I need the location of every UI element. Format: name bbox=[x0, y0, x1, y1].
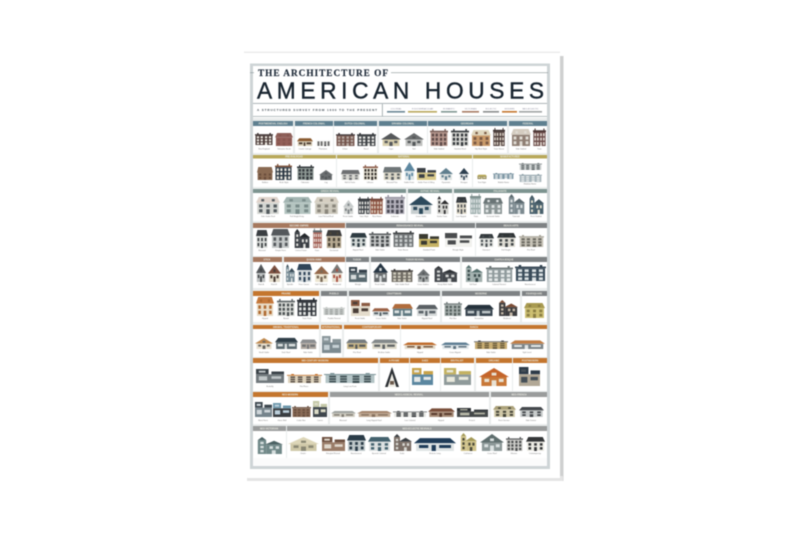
house: ne 5: French bbox=[469, 419, 475, 422]
house: tudor: Shingle bbox=[355, 284, 361, 286]
section: shed: SHED bbox=[422, 360, 429, 362]
house: georgian b: Gambrel Roof bbox=[454, 148, 466, 150]
house: rv 9 bbox=[506, 437, 523, 455]
section: prairie: PRAIRIE bbox=[281, 292, 291, 296]
section: cape cod bbox=[379, 121, 427, 153]
house: urban: Urban bbox=[342, 148, 348, 150]
section: brutalist: BRUTALIST bbox=[451, 360, 464, 362]
house: c 3: Neoclassical bbox=[525, 284, 536, 286]
house: se 1: Mansard bbox=[258, 249, 266, 252]
house: mt 3: Side Gable bbox=[303, 352, 313, 354]
section: craftsman bbox=[349, 291, 440, 322]
section: cape cod: SPANISH COLONIAL bbox=[392, 122, 415, 126]
house: gr 7 bbox=[385, 195, 405, 218]
house: tent: Tent Style bbox=[478, 181, 486, 184]
house: ne 2: Long Hipped Roof bbox=[366, 420, 382, 422]
house: mc 3: Long Low Form bbox=[343, 385, 357, 388]
section: folk colonial: PRE-RAILROAD bbox=[285, 156, 303, 158]
section: ranch bbox=[401, 325, 547, 357]
house: cr 2: Cross Gable bbox=[376, 317, 386, 320]
house: rv 10: Contemporary bbox=[529, 452, 541, 455]
section: gothic revival: GOTHIC REVIVAL bbox=[420, 190, 440, 193]
house: rural: Rural bbox=[364, 148, 369, 150]
house: ital d: Towered bbox=[512, 215, 520, 218]
house: cr 1: Front Gable bbox=[355, 317, 365, 320]
section: neoclassical revival bbox=[330, 392, 489, 424]
section: craftsman: CRAFTSMAN bbox=[387, 292, 402, 296]
house: ba 1: Classical bbox=[482, 250, 490, 252]
house: nf 1: Front Dormer bbox=[498, 419, 510, 422]
legend: VICTORIAN bbox=[465, 107, 477, 110]
house: qa 3: Half Timbered bbox=[315, 283, 327, 286]
house: gr 6: Row Home bbox=[372, 216, 382, 218]
house: i house: Tidewater bbox=[301, 181, 309, 184]
section: georgian bbox=[428, 121, 507, 153]
house: ne 1 bbox=[331, 411, 356, 422]
section: gothic revival bbox=[408, 189, 452, 221]
house: gr 2: Full Height Entry bbox=[290, 215, 304, 218]
house: mo 3: Medieval bbox=[503, 318, 511, 320]
section: federal bbox=[509, 121, 547, 153]
house: gr 2 bbox=[283, 197, 312, 218]
section: minimal traditional: MINIMAL TRADITIONAL bbox=[273, 326, 300, 329]
house: ital e: Front Gabled bbox=[530, 215, 542, 218]
house: mc 2: Flat Plane bbox=[300, 385, 308, 388]
house: rv 2 bbox=[322, 437, 345, 455]
house: nf 2: Side Dormer bbox=[526, 419, 537, 422]
section: moderne bbox=[442, 291, 520, 322]
house: georgian c: Hip Roof Style bbox=[475, 148, 487, 150]
house: federal a: Side Gabled bbox=[516, 148, 526, 150]
section: federal: FEDERAL bbox=[523, 122, 534, 126]
section: neo-eclectic revivals: NEO-ECLECTIC REVIVALS bbox=[402, 428, 432, 430]
house: hall and parlor: Hall & Parlor bbox=[345, 181, 356, 184]
section: ranch: RANCH bbox=[470, 326, 478, 329]
section: postmedieval english: POSTMEDIEVAL ENGLISH bbox=[259, 122, 288, 126]
section: postmedieval english bbox=[253, 121, 293, 153]
section: georgian: GEORGIAN bbox=[461, 122, 474, 126]
section: neo-victorian bbox=[253, 426, 286, 458]
section: brutalist bbox=[441, 358, 474, 391]
house: pueblo: Pueblo Revival bbox=[328, 318, 341, 320]
section: shed bbox=[410, 358, 440, 391]
house: p 1: Hipped bbox=[262, 318, 268, 320]
house: ital c: Centered Gable bbox=[486, 215, 500, 218]
section: a-frame bbox=[380, 358, 409, 391]
house: gr 5: Town Style bbox=[359, 215, 369, 218]
house: ne 5 bbox=[457, 408, 488, 422]
house: rv 1: Chalet bbox=[300, 452, 306, 455]
house: p 3: Town Form bbox=[302, 317, 312, 320]
house: rv 7: Craftsman bbox=[464, 452, 472, 455]
house: c 2: Colonial Revival bbox=[492, 284, 506, 286]
house: neo-victorian bbox=[258, 437, 283, 454]
house: ba 2: Full Height bbox=[501, 248, 511, 252]
house: gr 7: Italianate bbox=[391, 215, 399, 218]
section: dutch colonial: DUTCH COLONIAL bbox=[345, 122, 366, 126]
house: gr 3: Low Pitched Roof bbox=[319, 215, 334, 218]
section: manufactured bbox=[473, 155, 547, 187]
section: beaux arts bbox=[476, 223, 547, 256]
house: rv 10 bbox=[526, 437, 545, 455]
house: foursquare bbox=[524, 303, 545, 318]
house: mo 1: Flat Box bbox=[450, 317, 457, 320]
house: gable front: Gable Front bbox=[404, 181, 414, 184]
house: gr 4 bbox=[343, 200, 354, 218]
house: cr 3: Side Gable bbox=[397, 318, 407, 320]
house: r 2: Cross Hipped bbox=[449, 351, 461, 354]
house: gr 4: Front Gable bbox=[343, 215, 353, 218]
section: italianate: ITALIANATE bbox=[493, 190, 507, 193]
section: neo-eclectic revivals bbox=[287, 426, 547, 458]
section: prairie bbox=[253, 291, 319, 322]
legend: MODERN bbox=[505, 108, 515, 110]
house: rv 4: Spanish Colonial bbox=[372, 453, 387, 455]
house: modular bottom: Modular Home bbox=[524, 182, 536, 186]
house: t 4: Steep Multi Gable bbox=[437, 283, 453, 286]
section: organic: ORGANIC bbox=[489, 360, 500, 362]
section: stick: STICK bbox=[264, 260, 271, 262]
house: rv 8: Cross Roof bbox=[487, 452, 497, 455]
house: rv 1 bbox=[288, 437, 319, 455]
house: ct 1: Flat Roof bbox=[353, 351, 361, 354]
house: brick: Brick Style bbox=[280, 181, 288, 184]
house: r 4 bbox=[510, 340, 545, 354]
house: rr 2: Side Gable bbox=[375, 250, 385, 252]
section: french colonial bbox=[295, 121, 333, 153]
house: mo 2: Streamline bbox=[474, 317, 484, 320]
house: rv 3: Neoclassical bbox=[351, 453, 362, 455]
house: postmodern bbox=[519, 367, 540, 386]
section: greek revival: GREEK REVIVAL bbox=[321, 190, 340, 193]
section: shingle bbox=[346, 257, 369, 288]
section: international: INTERNATIONAL bbox=[322, 326, 341, 329]
section: french colonial: FRENCH COLONIAL bbox=[303, 122, 326, 126]
section: contemporary: CONTEMPORARY bbox=[362, 326, 382, 329]
house: t 1: Front Gable bbox=[375, 283, 385, 286]
section: foursquare bbox=[522, 291, 547, 322]
section: pueblo bbox=[321, 291, 347, 322]
house: gr 6 bbox=[370, 197, 383, 218]
house: ne 4 bbox=[428, 408, 455, 422]
house: gr 1 bbox=[256, 197, 280, 218]
house: nm 4: Corner bbox=[317, 419, 323, 422]
house: rv 7 bbox=[461, 433, 477, 455]
house: shed bbox=[412, 368, 433, 385]
section: contemporary bbox=[344, 325, 400, 357]
section: postmodern: POSTMODERN bbox=[522, 360, 539, 362]
house: ne 1: Mansard bbox=[339, 419, 347, 422]
house: raised: Plantation bbox=[319, 148, 327, 150]
house: federal b: Town bbox=[537, 148, 542, 150]
house: r 3 bbox=[474, 340, 508, 354]
house: ne 3 bbox=[393, 411, 427, 422]
house: gable front and wing: Gable Front & Wing bbox=[418, 181, 434, 184]
house: r 3: Side Gable bbox=[486, 352, 496, 354]
house: gr 5 bbox=[358, 197, 370, 218]
section: neo-french bbox=[491, 392, 547, 424]
house: georgian a: Side Gabled bbox=[434, 148, 444, 150]
house: qa 1: Spindle bbox=[287, 284, 293, 286]
house: rv 6 bbox=[414, 438, 456, 455]
house: ba 3: Flat Roof bbox=[527, 248, 535, 252]
section: tudor revival: TUDOR REVIVAL bbox=[406, 258, 425, 262]
section: neo-modern bbox=[253, 392, 328, 424]
house: r 1: Hipped bbox=[417, 352, 423, 354]
section: dutch colonial bbox=[334, 121, 377, 153]
house: r 1 bbox=[403, 343, 437, 354]
house: rv 5: Tudor bbox=[400, 452, 405, 455]
section: foursquare: FOURSQUARE bbox=[526, 292, 543, 296]
house: rv 4 bbox=[368, 437, 391, 455]
house: rv 6: Eclectic Long bbox=[429, 452, 441, 455]
house: ne 2 bbox=[357, 411, 392, 422]
house: se 3: Central Tower bbox=[295, 249, 307, 252]
house: t 3: Cross Gables bbox=[417, 283, 429, 286]
section: tudor revival bbox=[371, 257, 460, 288]
legend: FOLK/VERNACULAR bbox=[412, 107, 434, 110]
legend bbox=[387, 107, 542, 113]
house: mc 1: Butterfly bbox=[267, 385, 274, 388]
poster frame bbox=[250, 64, 550, 469]
section: postmodern bbox=[513, 358, 547, 391]
house: half cape: Cape bbox=[389, 148, 393, 150]
house: nm 2: Glass Wall bbox=[278, 420, 287, 422]
section: renaissance revival bbox=[346, 223, 475, 256]
house: log: Log bbox=[324, 182, 328, 184]
house: t 2: Side Gable Roof bbox=[395, 284, 409, 286]
house: gothic b: Gothic Town bbox=[437, 215, 447, 218]
house: se 2: Simple Form bbox=[275, 249, 286, 252]
poster shadow bbox=[244, 52, 564, 481]
title: overline: THE ARCHITECTURE OF bbox=[258, 69, 388, 79]
section: second empire: SECOND EMPIRE bbox=[289, 226, 309, 228]
section: minimal traditional bbox=[253, 325, 319, 357]
section: greek revival bbox=[253, 189, 406, 221]
house: ne 4: Hipped bbox=[438, 420, 444, 422]
section: moderne: MODERNE bbox=[475, 294, 487, 296]
subtitle: A STRUCTURED SURVEY FROM 1600 TO THE PRESENT bbox=[257, 108, 377, 112]
house: tidewater south: Tidewater South bbox=[277, 148, 291, 150]
section: beaux arts: BEAUX ARTS bbox=[504, 224, 519, 228]
house: shotgun: Shotgun bbox=[460, 181, 468, 184]
house: organic bbox=[479, 368, 509, 386]
section: queen anne: QUEEN ANNE bbox=[306, 258, 322, 262]
house: ct 2: Shallow Gable bbox=[378, 352, 390, 354]
poster sheet bbox=[244, 53, 560, 478]
section: neo-french: NEO-FRENCH bbox=[511, 394, 527, 396]
section: mid-century modern bbox=[253, 358, 378, 391]
house: rv 2: Shingled Revival bbox=[326, 453, 341, 455]
house: rv 8 bbox=[480, 434, 504, 455]
section: international bbox=[321, 325, 342, 357]
section: a-frame: A-FRAME bbox=[389, 360, 400, 362]
section: neoclassical revival: NEOCLASSICAL REVIVAL bbox=[395, 394, 424, 396]
section: mid-century modern: MID-CENTURY MODERN bbox=[302, 360, 329, 362]
section: renaissance revival: RENAISSANCE REVIVAL bbox=[396, 224, 424, 228]
house: ital a: Low Hipped bbox=[456, 216, 466, 218]
title: main: AMERICAN HOUSES bbox=[257, 77, 544, 103]
icon: a-frame house bbox=[385, 367, 399, 387]
house: international bbox=[322, 336, 341, 353]
section: organic bbox=[476, 358, 512, 391]
section: pueblo: PUEBLO bbox=[329, 294, 339, 296]
house: massed plan: Massed Plan bbox=[387, 182, 397, 184]
house: c 1: Tall Roof bbox=[469, 284, 477, 286]
house: ne 3: Low Colonial bbox=[405, 420, 416, 422]
house: mobile: Mobile Home bbox=[498, 182, 509, 184]
house: i-house: I-House bbox=[367, 182, 373, 184]
house: modular top bbox=[519, 163, 542, 170]
legend: NEO-ECLECTIC bbox=[522, 108, 539, 110]
legend: COLONIAL bbox=[390, 107, 402, 110]
house: nm 1: Block Form bbox=[258, 419, 268, 422]
house: r 2 bbox=[441, 343, 470, 354]
section: second empire bbox=[253, 223, 345, 256]
section: neo-victorian: NEO-VICTORIAN bbox=[260, 428, 279, 430]
house: new england: New England bbox=[258, 148, 270, 150]
house: nm 3: Cedar Box bbox=[297, 419, 306, 422]
house: r 4: Split Level bbox=[523, 351, 532, 354]
house: full cape: Salt bbox=[412, 148, 416, 150]
house: rv 5 bbox=[394, 434, 412, 455]
house: brutalist bbox=[444, 368, 471, 385]
house: creole: Creole Cottage bbox=[299, 148, 311, 150]
legend: ECLECTIC bbox=[486, 108, 497, 110]
house: rv 9: Mission bbox=[511, 453, 517, 455]
house: ital b: Town bbox=[474, 216, 478, 218]
section: national bbox=[337, 155, 472, 187]
house: stick b: Stick B bbox=[271, 283, 278, 286]
house: qa 4: Patterned bbox=[333, 283, 341, 286]
section: italianate bbox=[454, 189, 547, 221]
house: rr 3: Town House bbox=[398, 250, 408, 252]
house: qa 2: Free Classic bbox=[299, 283, 309, 286]
house: rr 1: Hipped Roof bbox=[353, 250, 364, 252]
section: national: NATIONAL bbox=[398, 156, 410, 158]
section: stick bbox=[253, 257, 282, 288]
section: manufactured: MANUFACTURED bbox=[500, 156, 520, 158]
header panel bbox=[250, 66, 548, 118]
house: stick a: Stick A bbox=[258, 283, 265, 286]
house: gothic a: Cross Gable bbox=[416, 215, 426, 218]
house: mt 2: Dark Roof bbox=[282, 351, 291, 354]
section: chateauesque: CHATEAUESQUE bbox=[494, 258, 514, 262]
house: saltbox: Saltbox bbox=[262, 181, 268, 184]
house: georgian d: Town House bbox=[494, 148, 504, 150]
house: rr 4: Gambrel Front bbox=[423, 248, 436, 252]
house: cr 4: Hipped Roof bbox=[422, 318, 433, 320]
house: mt 1: Small Gable bbox=[259, 352, 269, 354]
section: neo-modern: NEO-MODERN bbox=[282, 394, 298, 396]
section: folk colonial bbox=[253, 155, 336, 187]
house: pyramidal: Pyramidal bbox=[442, 181, 451, 184]
house: se 5: Dormered bbox=[330, 249, 338, 252]
house: rv 3 bbox=[347, 435, 366, 455]
house: gr 1: Side Gable Roof bbox=[261, 216, 275, 218]
house: se 4: Town bbox=[315, 250, 319, 252]
legend: ROMANTIC bbox=[443, 107, 455, 110]
house: gr 3 bbox=[314, 197, 339, 218]
house: p 2: Boxed bbox=[283, 318, 289, 320]
house: rr 5: Shingle Style bbox=[452, 248, 464, 252]
section: shingle: TUDOR bbox=[353, 260, 361, 262]
section: queen anne bbox=[284, 257, 345, 288]
section: chateauesque bbox=[462, 257, 547, 288]
